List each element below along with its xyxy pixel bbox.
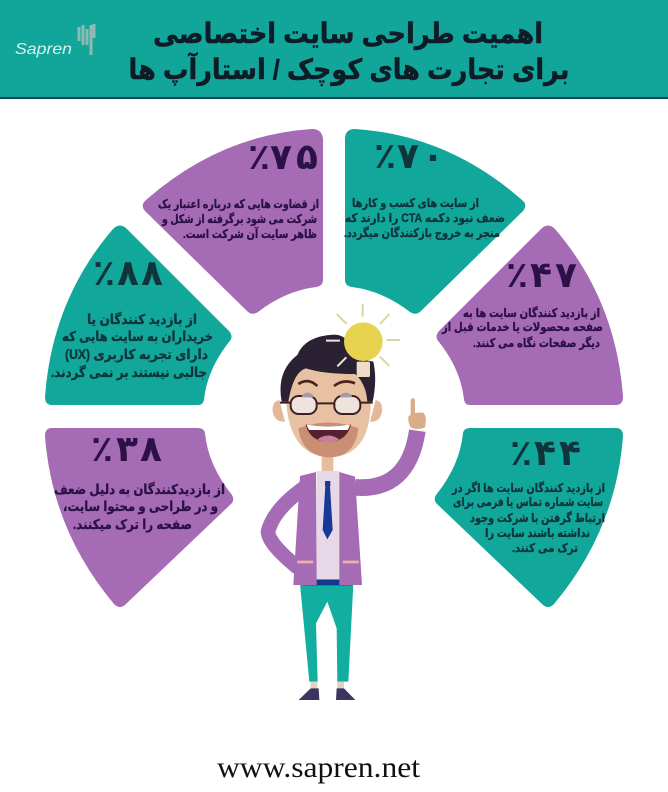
description: 38 percent: از بازدیدکنندگان به دلیل ضعف bbox=[54, 481, 225, 497]
description: 47 percent: دیگر صفحات نگاه می کنند. bbox=[473, 336, 600, 350]
description: 70 percent: منجر به خروج بازکنندگان میگردد. bbox=[344, 226, 500, 241]
description: 70 percent: ضعف نبود دکمه CTA را دارند که bbox=[345, 211, 505, 226]
description: 47 percent bbox=[441, 306, 603, 350]
description: 44 percent: سایت شماره تماس یا فرمی برای bbox=[453, 495, 603, 509]
panel: 44 percent bbox=[435, 428, 623, 607]
trousers bbox=[300, 584, 353, 682]
stat: 75 percent: ٪۷۵ bbox=[248, 137, 318, 178]
left arm bbox=[268, 488, 303, 567]
glasses bbox=[280, 393, 373, 414]
panel: 75 percent bbox=[143, 129, 323, 314]
hair bbox=[280, 335, 375, 402]
stat: 88 percent: ٪۸۸ bbox=[93, 253, 163, 294]
description: 88 percent: خریداران به سایت هایی که bbox=[62, 329, 213, 344]
pointing hand bbox=[408, 398, 426, 429]
belt bbox=[303, 579, 352, 585]
beard bbox=[298, 422, 358, 457]
stat: 38 percent: ٪۳۸ bbox=[91, 429, 162, 470]
mouth bbox=[306, 424, 351, 442]
description: 70 percent bbox=[344, 196, 505, 241]
right arm bbox=[355, 431, 417, 488]
description: 38 percent bbox=[54, 481, 225, 532]
shirt bbox=[317, 471, 339, 579]
description: 70 percent: از سایت های کسب و کارها bbox=[352, 196, 479, 211]
stat: 70 percent: ٪۷۰ bbox=[374, 136, 444, 177]
description: 44 percent: ترک می کنند. bbox=[512, 541, 578, 555]
description: 75 percent bbox=[158, 197, 319, 241]
title: اهمیت طراحی سایت اختصاصی bbox=[153, 18, 543, 50]
header banner bbox=[0, 0, 668, 99]
description: 88 percent: جالبی نیستند بر نمی گردند. bbox=[51, 364, 207, 380]
title bbox=[128, 18, 570, 86]
description: 38 percent: و در طراحی و محتوا سایت، bbox=[63, 499, 218, 514]
neck bbox=[322, 455, 333, 475]
description: 88 percent: دارای تجربه کاربری (UX) bbox=[65, 347, 208, 362]
description: 47 percent: صفحه محصولات یا خدمات قبل از bbox=[441, 320, 603, 335]
pocket strips bbox=[297, 561, 359, 563]
stat: 44 percent: ٪۴۴ bbox=[510, 433, 581, 474]
shoes bbox=[299, 688, 355, 700]
ears bbox=[273, 400, 382, 422]
jacket bbox=[293, 472, 362, 585]
description: 44 percent: از بازدید کنندگان سایت ها اگر در bbox=[451, 481, 605, 495]
description: 44 percent: ارتباط گرفتن با شرکت وجود bbox=[470, 511, 605, 526]
description: 47 percent: از بازدید کنندگان سایت ها به bbox=[463, 306, 600, 320]
panel: 38 percent bbox=[45, 428, 233, 607]
stat: 47 percent: ٪۴۷ bbox=[506, 255, 577, 296]
socks bbox=[311, 682, 344, 689]
face bbox=[286, 367, 371, 457]
description: 75 percent: ظاهر سایت آن شرکت است. bbox=[183, 226, 317, 241]
hair highlights bbox=[326, 341, 346, 366]
panel: 88 percent bbox=[45, 226, 232, 405]
description: 44 percent bbox=[451, 481, 605, 555]
website url: www.sapren.net bbox=[217, 751, 421, 784]
panel: 70 percent bbox=[344, 129, 525, 314]
panel: 47 percent bbox=[436, 226, 623, 405]
description: 88 percent: از بازدید کنندگان یا bbox=[87, 311, 197, 327]
title: برای تجارت های کوچک / استارآپ ها bbox=[128, 52, 570, 86]
description: 44 percent: نداشته باشند سایت را bbox=[485, 526, 590, 540]
description: 88 percent bbox=[51, 311, 213, 380]
logo: Sapren bbox=[15, 24, 94, 58]
description: 38 percent: صفحه را ترک میکنند. bbox=[73, 517, 192, 532]
description: 75 percent: از قضاوت هایی که درباره اعتبار یک bbox=[158, 197, 319, 212]
character: man with light bulb bbox=[268, 304, 426, 700]
light bulb bbox=[337, 304, 400, 377]
logo: Sapren: Sapren bbox=[15, 41, 72, 58]
eyebrows bbox=[298, 381, 355, 386]
description: 75 percent: شرکت می شود برگرفته از شکل و bbox=[161, 212, 317, 227]
tie bbox=[323, 481, 333, 539]
